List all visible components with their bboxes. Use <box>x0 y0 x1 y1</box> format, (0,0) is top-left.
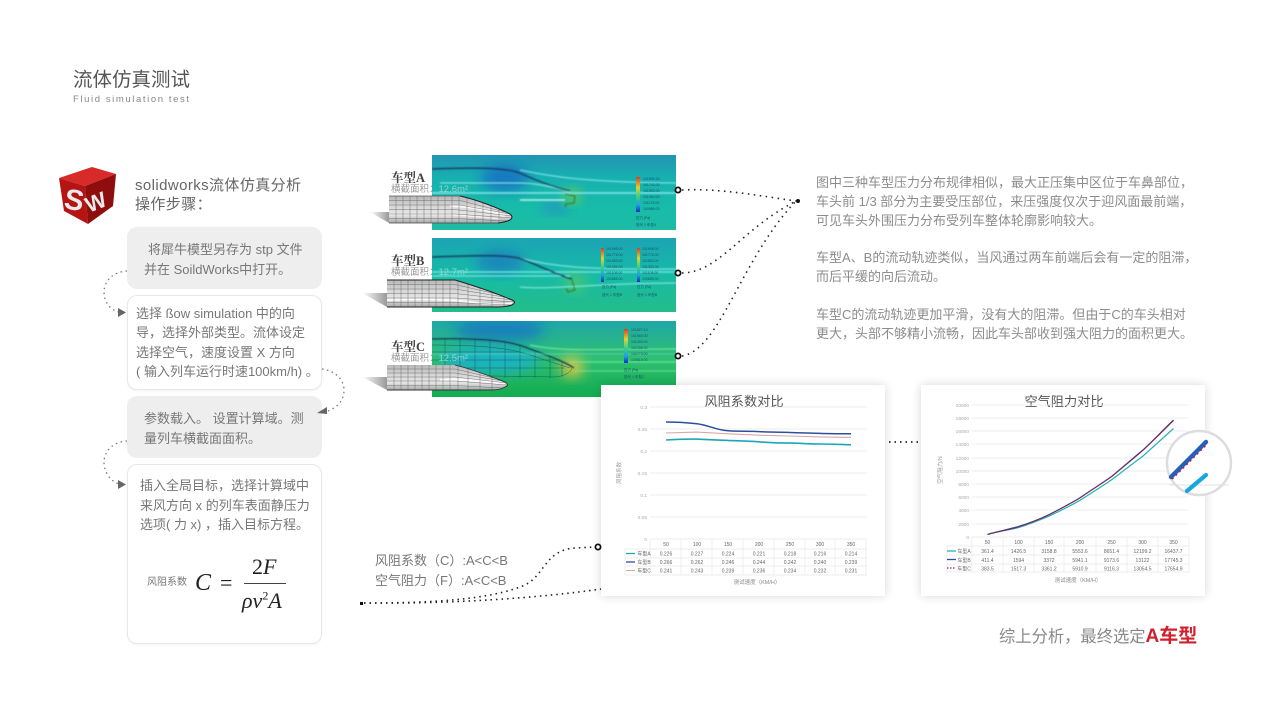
chart: air resistance comparison: 空气阻力对比 <box>1024 394 1104 409</box>
panel: car C simulation: 101300.00 <box>631 340 648 344</box>
chart: drag coefficient comparison: 0.221 <box>753 552 765 558</box>
label: car C: 横截面积：12.5m² <box>391 352 468 364</box>
chart: drag coefficient comparison: 0.239 <box>722 568 734 574</box>
panel: car B simulation: 101330.00 <box>642 265 659 269</box>
step 4 panel with formula: ρv2A <box>242 588 282 613</box>
heading: solidworks steps: solidworks流体仿真分析 <box>135 177 301 194</box>
chart: drag coefficient comparison: 0.218 <box>784 552 796 558</box>
chart: drag coefficient comparison: 300 <box>816 542 824 548</box>
panel: car A simulation: 101175.00 <box>643 201 659 205</box>
label: car B: 车型B <box>391 253 424 268</box>
heading: solidworks steps: 操作步骤： <box>135 196 212 212</box>
panel: car C simulation <box>432 318 676 397</box>
chart: drag coefficient comparison: 0.241 <box>660 568 672 574</box>
chart: air resistance comparison: 100 <box>1014 540 1023 546</box>
chart: drag coefficient comparison: 车型A <box>637 550 651 558</box>
text: ranking summary <box>375 553 508 588</box>
panel: car C simulation: 压力 [Pa] <box>624 367 638 372</box>
analysis text: 车头前 1/3 部分为主要受压部位，来压强度仅次于迎风面最前端， <box>816 194 1192 209</box>
chart: drag coefficient comparison: 200 <box>755 542 763 548</box>
chart: drag coefficient comparison: 测试速度（KM/H） <box>734 578 780 586</box>
panel: car A simulation: 100986.00 <box>643 207 660 211</box>
chart: air resistance comparison: 空气阻力/N <box>936 456 944 484</box>
step 4 panel with formula: C <box>195 570 211 596</box>
chart: air resistance comparison: 300 <box>1138 540 1147 546</box>
step 3 panel <box>127 396 322 458</box>
analysis text <box>816 175 1197 341</box>
step 1 panel: 并在 SoildWorks中打开。 <box>144 262 291 277</box>
chart: drag coefficient comparison: 风阻系数 <box>615 462 623 484</box>
chart: air resistance comparison: 5553.6 <box>1072 549 1088 555</box>
chart: air resistance comparison: 0 <box>966 535 969 541</box>
panel: car B simulation: 压力 [Pa] <box>602 284 616 289</box>
chart: drag coefficient comparison: 车型B <box>637 559 651 566</box>
chart: air resistance comparison: 13054.5 <box>1133 566 1152 572</box>
title: Fluid simulation test <box>73 94 191 105</box>
panel: car B simulation: 101998.00 <box>642 247 659 251</box>
chart: drag coefficient comparison: 0.216 <box>814 552 826 558</box>
chart: drag coefficient comparison: 0.224 <box>722 552 734 558</box>
panel: car A simulation: 迭代 1 车型A <box>636 222 657 227</box>
panel: car B simulation: 101553.00 <box>606 259 623 263</box>
chart: air resistance comparison: 9173.6 <box>1104 558 1119 564</box>
step 4 panel with formula: = <box>220 570 232 595</box>
panel: car B simulation: 101108.00 <box>642 271 658 275</box>
chart: air resistance comparison: 3372 <box>1043 558 1055 564</box>
chart: drag coefficient comparison: 0.25 <box>638 427 647 433</box>
label: car A: 车型A <box>391 170 425 185</box>
panel: car C simulation: 101827.10 <box>631 328 648 332</box>
step 4 panel with formula: 风阻系数 <box>147 577 187 588</box>
conclusion: 综上分析，最终选定A车型 <box>999 626 1197 647</box>
text: ranking summary: 空气阻力（F）:A<C<B <box>375 573 506 588</box>
chart: drag coefficient comparison: 0.2 <box>640 449 647 455</box>
chart: air resistance comparison: 13122 <box>1136 558 1150 564</box>
panel: car B simulation: 压力 [Pa] <box>637 284 651 289</box>
chart: air resistance comparison: 411.4 <box>981 558 994 564</box>
chart: air resistance comparison: 361.4 <box>981 549 994 555</box>
panel: car B simulation: 101330.00 <box>606 265 623 269</box>
chart: air resistance comparison: 50 <box>985 540 990 546</box>
icon: SolidWorks logo cube: S <box>62 183 86 218</box>
panel: car B simulation: 101998.00 <box>606 247 623 251</box>
analysis text: 更大，头部不够精小流畅，因此车头部收到强大阻力的面积更大。 <box>816 326 1193 341</box>
chart: drag coefficient comparison: 车型C <box>637 568 651 574</box>
chart: air resistance comparison: 14000 <box>956 442 969 448</box>
icon: SolidWorks logo cube <box>59 167 116 224</box>
chart: drag coefficient comparison: 0.1 <box>640 493 647 499</box>
chart: air resistance comparison: 12199.2 <box>1133 549 1152 555</box>
step 4 panel with formula: 选项( 力 x) ，插入目标方程。 <box>140 517 309 532</box>
train model B <box>362 280 514 307</box>
chart: air resistance comparison: 1594 <box>1013 558 1024 564</box>
chart: air resistance comparison: 10000 <box>956 469 969 475</box>
step 2 panel: ( 输入列车运行时速100km/h) 。 <box>136 364 319 379</box>
label: car B <box>391 253 468 278</box>
chart: air resistance comparison: 383.5 <box>981 566 994 572</box>
chart: air resistance comparison: 16000 <box>956 429 969 435</box>
panel: car B simulation: 101108.00 <box>606 271 622 275</box>
text: ranking summary: 风阻系数（C）:A<C<B <box>375 553 508 568</box>
panel: car A simulation: 101553.00 <box>643 189 660 193</box>
step 2 panel: 选择空气，速度设置 X 方向 <box>136 345 295 360</box>
chart: air resistance comparison: 8000 <box>958 482 969 488</box>
chart: drag coefficient comparison: 0.226 <box>660 552 672 558</box>
chart: air resistance comparison: 车型A <box>957 548 971 555</box>
label: car C <box>391 339 468 364</box>
heading: solidworks steps <box>135 177 301 212</box>
label: car B: 横截面积：12.7m² <box>391 266 468 278</box>
chart: drag coefficient comparison: 250 <box>786 542 794 548</box>
panel: car B simulation <box>432 238 676 312</box>
panel: car A simulation: 101991.00 <box>643 177 660 181</box>
chart: air resistance comparison: 5941.1 <box>1072 558 1088 564</box>
chart: air resistance comparison: 12000 <box>956 456 969 462</box>
chart: air resistance comparison: 3158.8 <box>1041 549 1057 555</box>
label: car C: 车型C <box>391 339 425 354</box>
step 1 panel <box>127 227 322 289</box>
chart: air resistance comparison: 150 <box>1045 540 1053 546</box>
panel: air resistance card <box>921 385 1205 596</box>
chart: air resistance comparison: 2000 <box>958 522 969 528</box>
chart: drag coefficient comparison: 0.231 <box>845 568 857 574</box>
panel: car B simulation: 迭代 1 车型B <box>602 292 623 297</box>
step 3 panel: 参数载入。 设置计算域。测 <box>144 411 304 426</box>
step 1 panel: 将犀牛模型另存为 stp 文件 <box>148 242 303 257</box>
chart: air resistance comparison: 3361.2 <box>1041 566 1057 572</box>
analysis text: 图中三种车型压力分布规律相似，最大正压集中区位于车鼻部位， <box>816 175 1193 190</box>
chart: air resistance comparison: 4000 <box>958 508 969 514</box>
chart: drag coefficient comparison: 50 <box>663 542 669 548</box>
chart: air resistance comparison: 17654.9 <box>1164 566 1183 572</box>
panel: car C simulation: 100510.00 <box>631 358 648 362</box>
chart: air resistance comparison: 17745.3 <box>1164 558 1183 564</box>
callout: magnified lines <box>1167 431 1231 495</box>
panel: car B simulation: 101776.00 <box>606 253 623 257</box>
chart: drag coefficient comparison: 0.236 <box>753 568 765 574</box>
chart: air resistance comparison: 6000 <box>958 495 969 501</box>
chart: air resistance comparison: 8651.4 <box>1104 549 1119 555</box>
chart: air resistance comparison: 车型C <box>957 566 971 572</box>
chart: air resistance comparison: 250 <box>1107 540 1116 546</box>
panel: car A simulation: 101742.00 <box>643 183 660 187</box>
chart: air resistance comparison: 200 <box>1076 540 1084 546</box>
panel: car A simulation: 压力 [Pa] <box>636 215 650 220</box>
analysis text: 车型C的流动轨迹更加平滑，没有大的阻滞。但由于C的车头相对 <box>816 307 1186 322</box>
step 4 panel with formula <box>127 464 322 644</box>
panel: car B simulation: 101776.00 <box>642 253 659 257</box>
chart: air resistance comparison: 350 <box>1169 540 1178 546</box>
step 4 panel with formula: 2F <box>252 554 276 579</box>
panel: car B simulation: 101553.00 <box>642 259 659 263</box>
chart: drag coefficient comparison: 0.3 <box>640 405 647 411</box>
analysis text: 车型A、B的流动轨迹类似，当风通过两车前端后会有一定的阻滞， <box>816 250 1197 265</box>
panel: car B simulation: 100885.00 <box>642 277 659 281</box>
analysis text: 而后平缓的向后流动。 <box>816 269 946 284</box>
panel: car A simulation: 101364.00 <box>643 195 660 199</box>
chart: drag coefficient comparison: 0 <box>644 537 647 543</box>
chart: drag coefficient comparison: 0.246 <box>722 560 734 566</box>
panel: car C simulation: 101036.00 <box>631 346 648 350</box>
analysis text: 可见车头外围压力分布受列车整体轮廓影响较大。 <box>816 213 1102 228</box>
chart: drag coefficient comparison: 0.232 <box>814 568 826 574</box>
chart: drag coefficient comparison: 350 <box>847 542 855 548</box>
chart: air resistance comparison: 1426.5 <box>1011 549 1026 555</box>
chart: air resistance comparison: 车型B <box>957 557 971 564</box>
chart: drag coefficient comparison: 0.244 <box>753 560 765 566</box>
chart: drag coefficient comparison: 风阻系数对比 <box>704 394 784 409</box>
chart: drag coefficient comparison: 0.227 <box>691 552 703 558</box>
panel: car B simulation: 100885.00 <box>606 277 623 281</box>
chart: drag coefficient comparison: 100 <box>693 542 701 548</box>
panel: car C simulation: 迭代 1 车型C <box>624 374 645 379</box>
chart: drag coefficient comparison: 0.15 <box>638 471 647 477</box>
step 2 panel: 选择 ßow simulation 中的向 <box>136 306 295 321</box>
step 2 panel <box>127 295 322 390</box>
chart: drag coefficient comparison: 0.05 <box>638 515 647 521</box>
panel: car B simulation: 迭代 1 车型B <box>637 292 658 297</box>
chart: air resistance comparison: 16437.7 <box>1164 549 1183 555</box>
panel: car A simulation <box>432 155 676 230</box>
title: 流体仿真测试 <box>73 69 190 91</box>
icon: SolidWorks logo cube: W <box>82 187 110 218</box>
step 4 panel with formula: 来风方向 x 的列车表面静压力 <box>140 498 310 513</box>
chart: air resistance comparison: 20000 <box>956 403 969 409</box>
panel: car C simulation: 101563.00 <box>631 334 648 338</box>
chart: drag coefficient comparison: 150 <box>724 542 732 548</box>
label: car A: 横截面积：12.6m² <box>391 183 468 195</box>
step 2 panel: 导，选择外部类型。流体设定 <box>136 325 305 340</box>
train model A <box>370 196 512 223</box>
label: car A <box>391 170 468 195</box>
panel: car C simulation: 100773.00 <box>631 352 648 356</box>
chart: drag coefficient comparison: 0.239 <box>845 560 857 566</box>
chart: drag coefficient comparison: 0.266 <box>660 560 672 566</box>
title <box>73 69 191 105</box>
chart: drag coefficient comparison: 0.234 <box>784 568 796 574</box>
chart: air resistance comparison: 1517.3 <box>1011 566 1026 572</box>
chart: drag coefficient comparison: 0.242 <box>784 560 796 566</box>
chart: drag coefficient comparison: 0.214 <box>845 552 857 558</box>
chart: drag coefficient comparison: 0.240 <box>814 560 826 566</box>
chart: air resistance comparison: 测试速度（KM/H） <box>1055 576 1101 584</box>
chart: drag coefficient comparison: 0.243 <box>691 568 703 574</box>
chart: air resistance comparison: 5910.9 <box>1072 566 1088 572</box>
simulation panels <box>364 155 676 397</box>
chart: air resistance comparison: 9116.3 <box>1104 566 1119 572</box>
chart: air resistance comparison: 18000 <box>956 416 969 422</box>
step 3 panel: 量列车横截面面积。 <box>144 431 261 446</box>
chart: drag coefficient comparison: 0.262 <box>691 560 703 566</box>
step 4 panel with formula: 插入全局目标，选择计算域中 <box>140 478 309 493</box>
panel: drag coefficient card <box>601 385 885 596</box>
train model C <box>362 365 508 390</box>
